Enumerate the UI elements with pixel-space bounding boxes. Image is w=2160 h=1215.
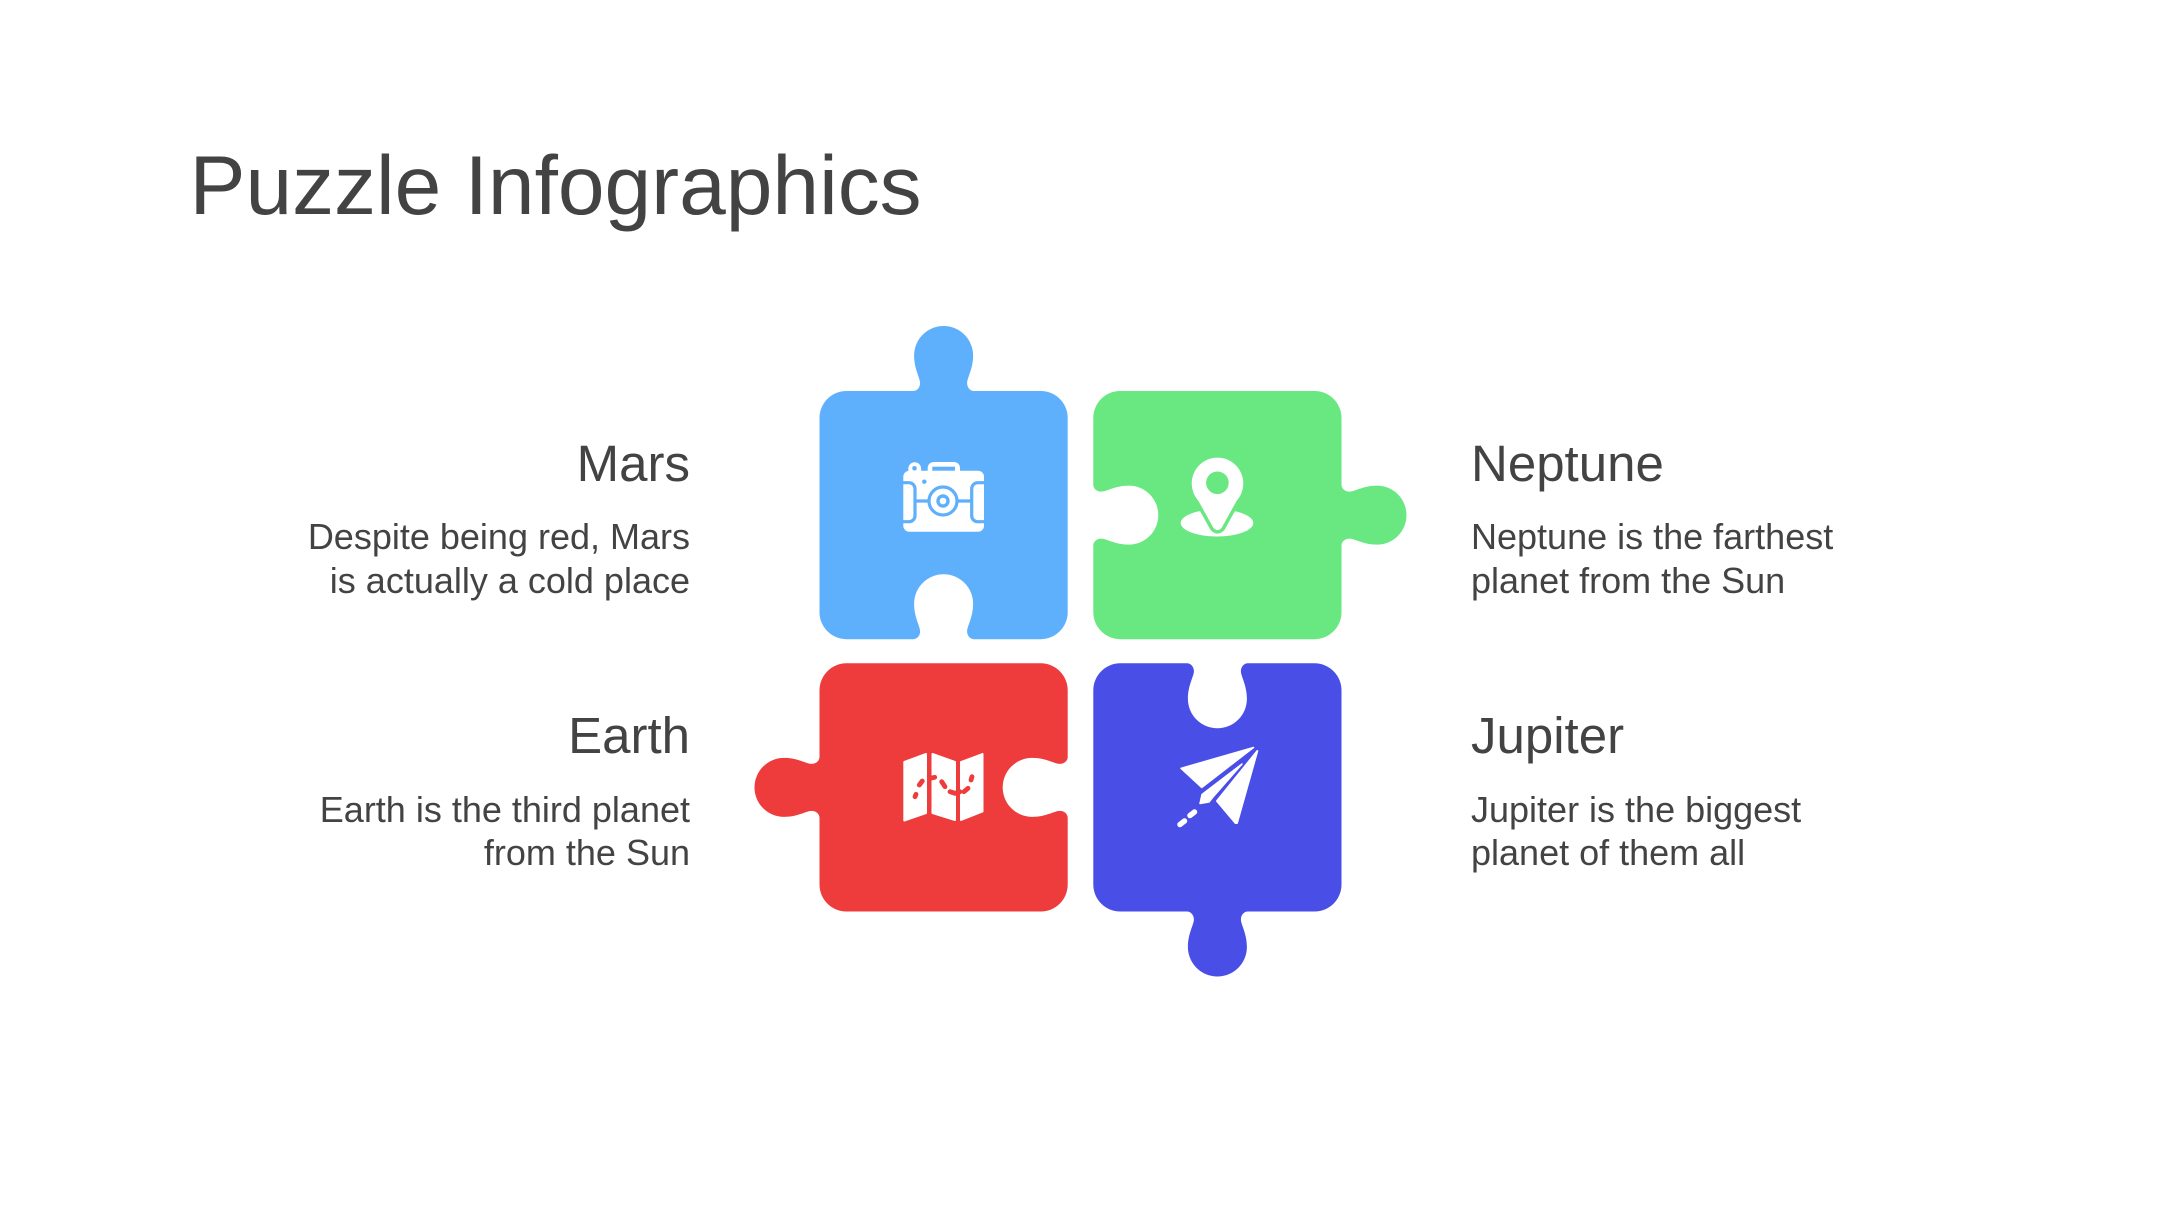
puzzle piece: green (Neptune) [1093, 391, 1406, 639]
description: Mars [308, 516, 690, 601]
description: Jupiter [1471, 788, 1801, 873]
description: Neptune: planet from the Sun [1471, 560, 1785, 601]
description: Neptune [1471, 516, 1833, 601]
description: Mars: is actually a cold place [330, 560, 690, 601]
description: Jupiter: planet of them all [1471, 832, 1745, 873]
icon: paper plane [1180, 748, 1257, 824]
description: Mars: Despite being red, Mars [308, 516, 690, 557]
description: Earth: Earth is the third planet [320, 788, 690, 830]
heading: Neptune: Neptune [1471, 435, 1664, 492]
heading: Jupiter: Jupiter [1471, 707, 1624, 764]
description: Neptune: Neptune is the farthest [1471, 516, 1833, 557]
icon: location pin [1181, 458, 1253, 536]
puzzle piece: red (Earth) [754, 663, 1068, 912]
text block: Earth [320, 707, 690, 873]
puzzle piece: indigo (Jupiter) [1093, 663, 1342, 977]
heading: Mars: Mars [577, 435, 690, 492]
text block: Jupiter [1471, 707, 1801, 873]
text block: Neptune [1471, 435, 1833, 601]
title: Puzzle Infographics [190, 138, 922, 232]
description: Earth: from the Sun [484, 832, 690, 873]
description: Jupiter: Jupiter is the biggest [1471, 788, 1801, 830]
puzzle piece: blue (Mars) [820, 326, 1068, 639]
icon: map [904, 754, 982, 820]
heading: Earth: Earth [568, 707, 690, 764]
description: Earth [320, 788, 690, 873]
icon: camera [903, 462, 984, 532]
text block: Mars [308, 435, 690, 601]
